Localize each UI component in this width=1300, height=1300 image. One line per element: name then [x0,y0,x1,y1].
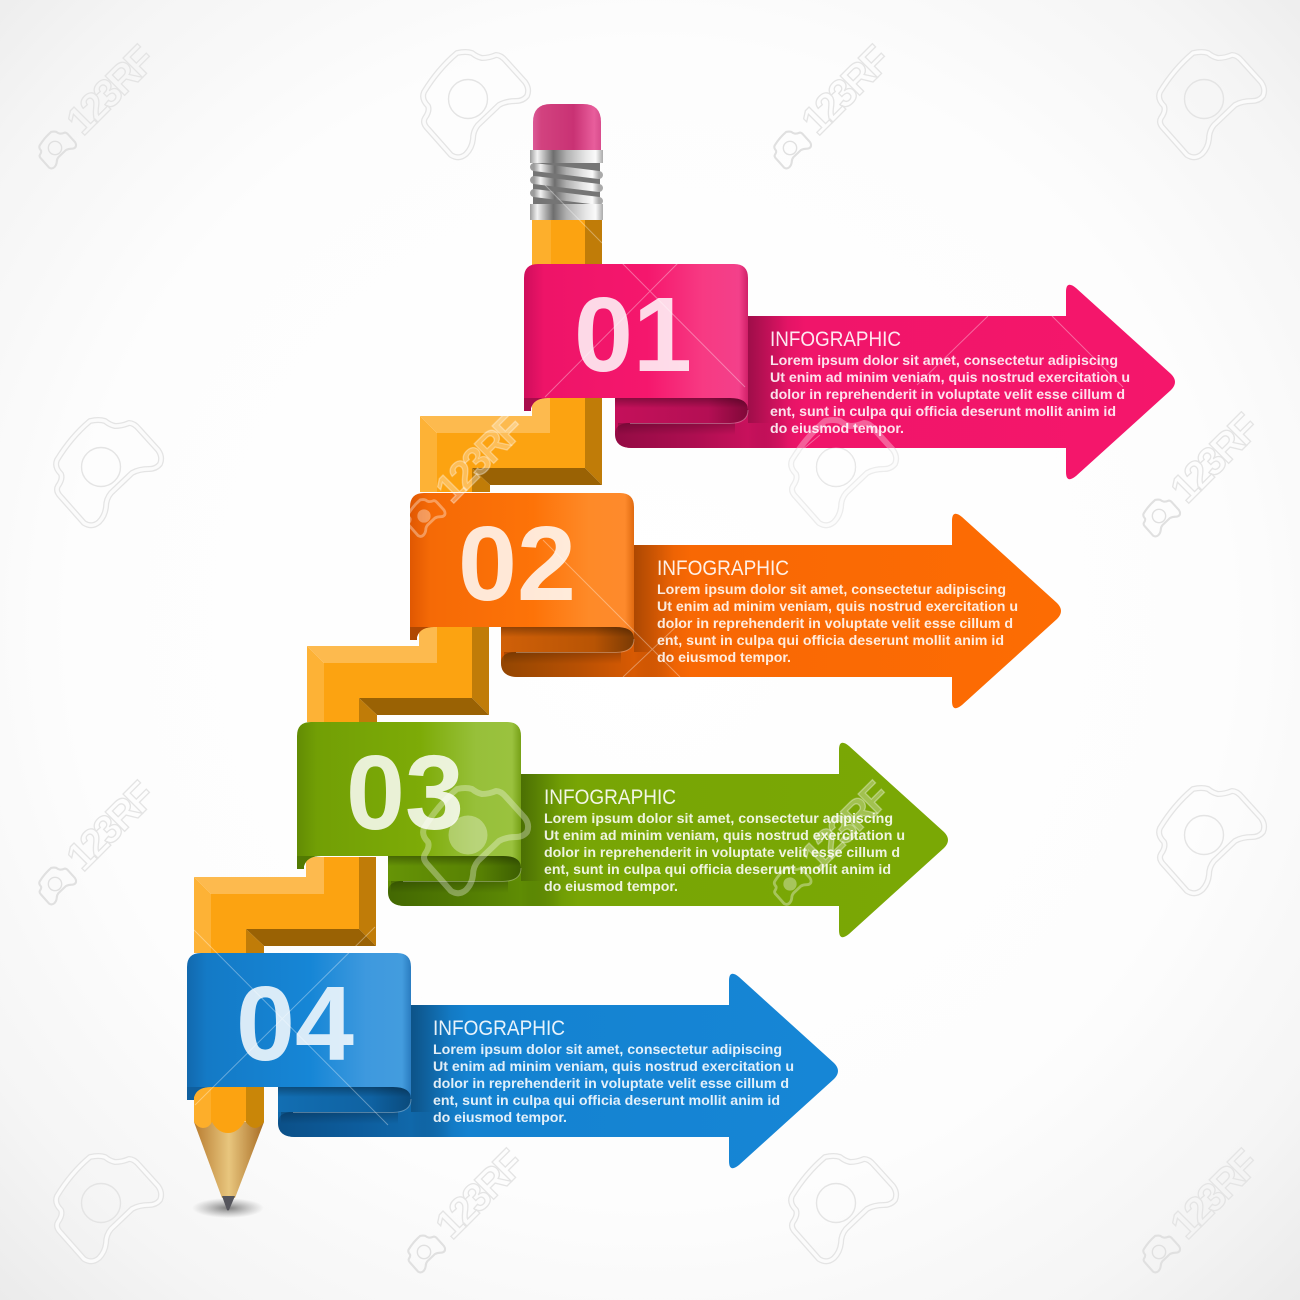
arrow 03 [388,743,948,937]
arrow 02 [501,514,1061,708]
pencil lower body [194,1085,264,1133]
ribbon shadow 02 [634,545,674,677]
text block 04 [433,1017,794,1126]
arrow 01 [615,285,1175,479]
ribbon curl 02 [501,627,676,677]
watermark overlay on artwork [194,185,1123,1125]
step 02 [410,493,1061,708]
text block 02: INFOGRAPHIC [657,557,789,580]
watermark overlay on artwork: 123RF [793,773,899,879]
text block 03 [544,786,905,895]
text block 02 [657,557,1018,666]
text block 03: Ut enim ad minim veniam, quis nostrud exercitation u [544,828,905,844]
text block 04: Lorem ipsum dolor sit amet, consectetur adipiscing [433,1042,782,1058]
pencil body [532,218,602,266]
text block 02: Lorem ipsum dolor sit amet, consectetur adipiscing [657,582,1006,598]
text block 01: Lorem ipsum dolor sit amet, consectetur adipiscing [770,353,1118,369]
step 01 [524,264,1175,479]
text block 01: do eiusmod tempor. [770,421,904,437]
text block 02: ent, sunt in culpa qui officia deserunt mollit anim id [657,633,1004,649]
ribbon 03 [297,722,521,869]
text block 04: Ut enim ad minim veniam, quis nostrud exercitation u [433,1059,794,1075]
eraser [533,104,601,152]
ribbon curl 03 [388,856,563,906]
number 04: 04 [236,965,354,1083]
ribbon shadow 04 [411,1005,451,1137]
ribbon shadow 03 [521,774,561,906]
graphite point [222,1196,235,1210]
text block 04: INFOGRAPHIC [433,1017,565,1040]
arrow 04 [278,974,838,1168]
tip shadow [192,1198,264,1218]
pencil zigzag 2 [307,626,489,722]
text block 01: Ut enim ad minim veniam, quis nostrud exercitation u [770,370,1130,386]
text block 01: INFOGRAPHIC [770,328,901,351]
text block 04: do eiusmod tempor. [433,1110,567,1126]
watermark pattern: 123RF [1162,1141,1268,1247]
ribbon curl 01 [615,398,790,448]
text block 03: INFOGRAPHIC [544,786,676,809]
text block 04: dolor in reprehenderit in voluptate velit esse cillum d [433,1076,789,1092]
text block 01: ent, sunt in culpa qui officia deserunt mollit anim id [770,404,1116,420]
text block 04: ent, sunt in culpa qui officia deserunt mollit anim id [433,1093,780,1109]
pencil zigzag 3 [194,857,376,953]
text block 02: Ut enim ad minim veniam, quis nostrud exercitation u [657,599,1018,615]
wood cone [194,1122,264,1198]
watermark pattern: 123RF [58,773,164,879]
watermark pattern: 123RF [58,37,164,143]
ribbon 02 [410,493,634,640]
text block 03: dolor in reprehenderit in voluptate velit esse cillum d [544,845,900,861]
text block 01: dolor in reprehenderit in voluptate velit esse cillum d [770,387,1125,403]
watermark pattern: 123RF [793,37,899,143]
text block 02: dolor in reprehenderit in voluptate velit esse cillum d [657,616,1013,632]
watermark pattern: 123RF [427,1141,533,1247]
ribbon shadow 01 [748,316,788,448]
watermark overlay on artwork: 123RF [427,405,533,511]
text block 01 [770,328,1130,437]
metal ferrule [530,150,603,220]
text block 03: ent, sunt in culpa qui officia deserunt mollit anim id [544,862,891,878]
text block 03: Lorem ipsum dolor sit amet, consectetur adipiscing [544,811,893,827]
text block 02: do eiusmod tempor. [657,650,791,666]
step 03 [297,722,948,937]
step 04 [187,953,838,1168]
text block 03: do eiusmod tempor. [544,879,678,895]
pencil zigzag 1 [420,396,602,492]
ribbon 01 [524,264,748,411]
ribbon curl 04 [278,1087,453,1137]
ribbon 04 [187,953,411,1100]
number 01: 01 [574,276,692,394]
pencil tip [192,1085,264,1218]
pencil top: eraser, ferrule and body [530,104,603,266]
watermark pattern: 123RF [1162,405,1268,511]
number 03: 03 [346,734,464,852]
number 02: 02 [458,505,576,623]
